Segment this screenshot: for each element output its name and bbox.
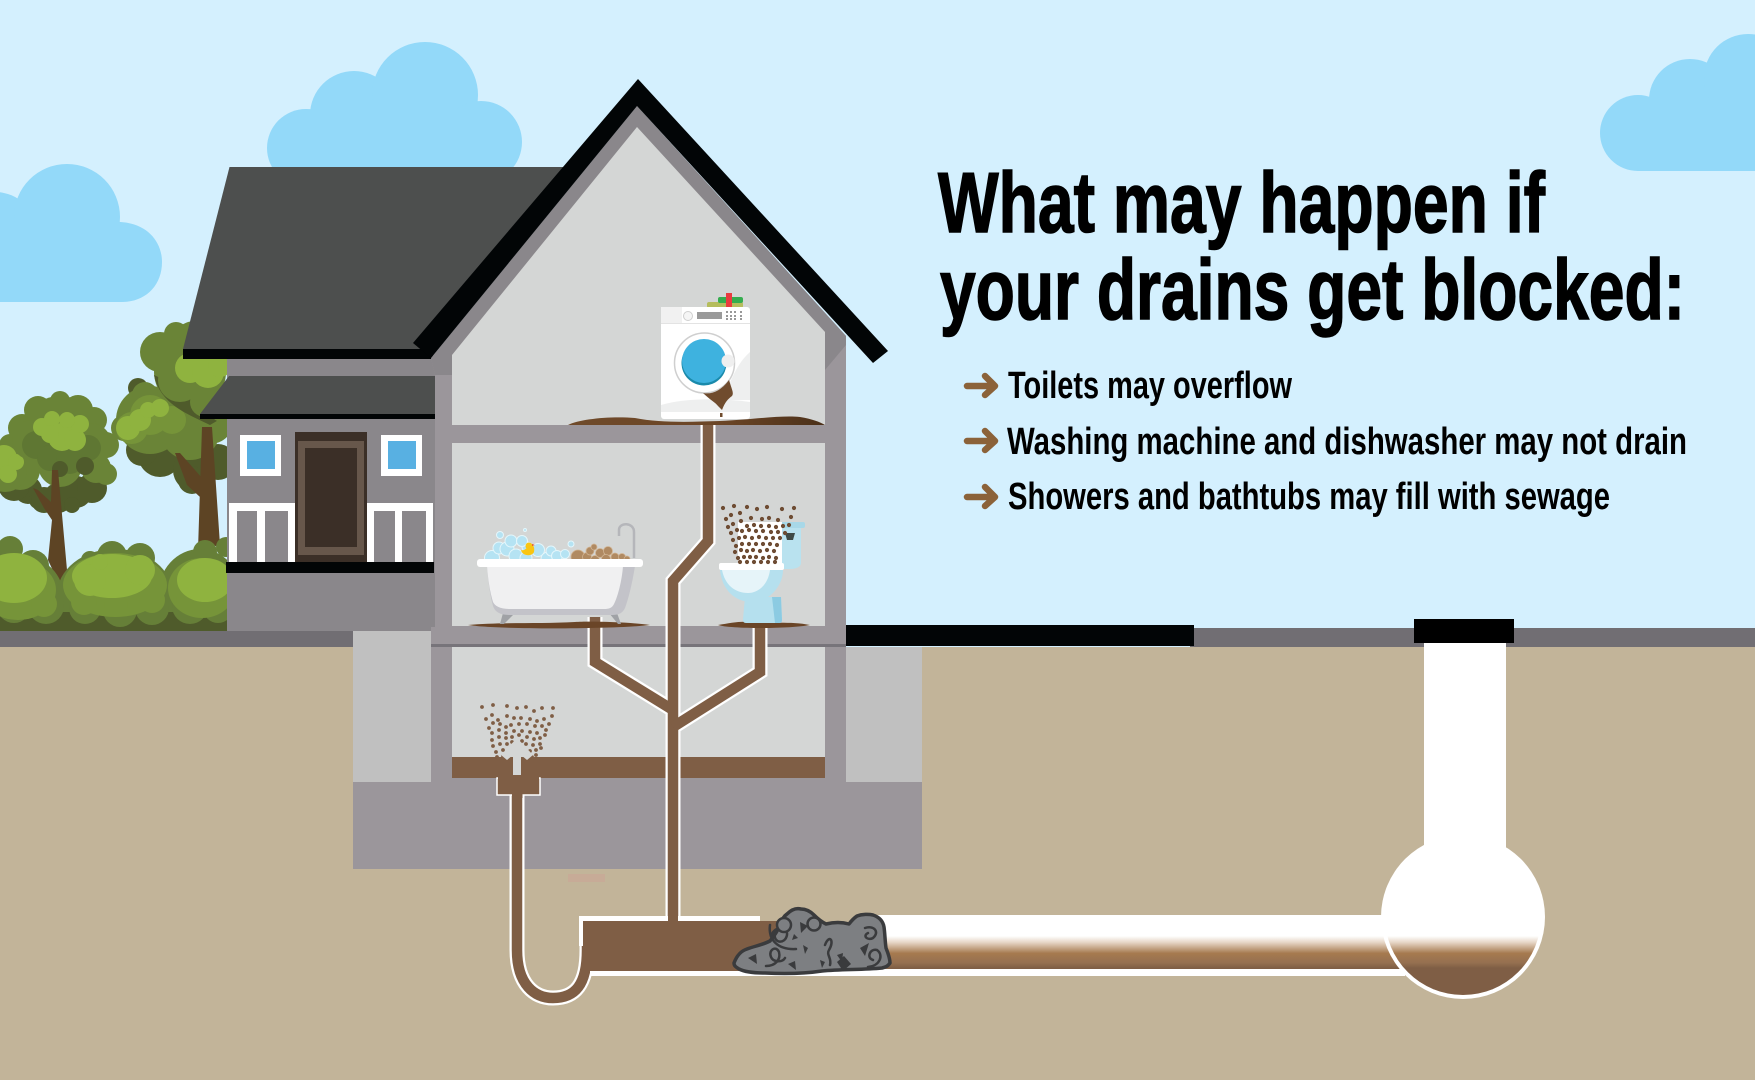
list item: toilets: Toilets may overflow (1008, 365, 1292, 407)
window left (240, 435, 281, 476)
toilet tank (775, 524, 801, 569)
soil stain (568, 874, 605, 882)
list: consequences (967, 365, 1687, 518)
house: side wing (183, 167, 570, 631)
porch roof (200, 376, 435, 414)
tree: right (111, 321, 236, 550)
toilet floor sewage (718, 622, 810, 628)
tub rim (477, 559, 643, 567)
cabinet (661, 307, 750, 419)
gable top band (431, 106, 846, 375)
foundation: left light block (353, 630, 431, 782)
house: gable section (413, 79, 888, 647)
foundation: right light block (844, 647, 922, 782)
house: foundation (353, 627, 922, 869)
ground: pavement strip (0, 628, 1755, 647)
main sewer pipe: clear section (860, 915, 1400, 969)
porch roof eave (200, 414, 435, 419)
bathtub (468, 524, 650, 628)
rubber duck (521, 542, 535, 555)
driveway (846, 625, 1194, 646)
manhole cover (1414, 619, 1514, 643)
bushes (0, 536, 227, 631)
main sewer pipe: partial flow (860, 936, 1400, 969)
leaking sewage (703, 380, 733, 417)
heading: What may happen if (938, 156, 1546, 251)
toilet seat (719, 563, 784, 570)
upper roof (183, 167, 570, 349)
list item: toilets (967, 365, 1292, 407)
manhole (1381, 619, 1545, 1000)
basement sewage floor (452, 757, 825, 778)
gable roof (413, 79, 888, 363)
heading (938, 156, 1685, 338)
tree: far left (0, 434, 47, 509)
basement floor drain (482, 705, 553, 798)
manhole sewage (1388, 937, 1538, 995)
blockage: debris pile (734, 909, 890, 974)
wing wall (227, 359, 435, 631)
cloud: right (1600, 34, 1755, 171)
ground: soil (0, 647, 1755, 1080)
manhole chamber (1381, 835, 1545, 999)
sewage spray (723, 506, 794, 562)
foam bubbles (484, 528, 574, 566)
cloud: left (0, 164, 162, 302)
pipe network: drain stacks and branches (517, 425, 760, 998)
upper floor sewage (568, 417, 825, 425)
window right (381, 435, 422, 476)
main sewer pipe: sewage (583, 921, 803, 971)
railing left (229, 503, 295, 562)
door (295, 432, 367, 562)
tub faucet (619, 524, 634, 558)
basement interior (452, 647, 825, 757)
floor slab line (431, 644, 846, 647)
porch deck (226, 562, 434, 573)
main sewer pipe: outline bottom (590, 969, 1405, 976)
items on top (707, 293, 743, 308)
pipes: white outlines (517, 425, 760, 998)
drain box (497, 778, 540, 795)
washing machine (661, 293, 750, 419)
cloud: center (267, 42, 522, 187)
upper floor interior (452, 127, 825, 425)
stack passes through outline (668, 910, 678, 924)
sewage spray (482, 705, 553, 757)
tub floor sewage (468, 622, 650, 628)
upper roof eave (183, 349, 433, 359)
railing right (367, 503, 433, 562)
tree: left (8, 391, 119, 590)
arrow up (501, 738, 533, 775)
tub feet (500, 613, 621, 624)
toilet flush handle (785, 533, 795, 540)
manhole shaft (1424, 643, 1506, 853)
main floor interior (452, 443, 825, 626)
basement walls (431, 627, 846, 782)
gable walls (431, 106, 846, 647)
drum (674, 333, 734, 393)
foundation: dark concrete (353, 782, 922, 869)
toilet bowl (720, 570, 783, 602)
trees (0, 321, 242, 641)
toilet (718, 506, 810, 628)
tub body (487, 566, 635, 615)
toilet base (743, 597, 782, 623)
sewage bubbles (571, 544, 630, 566)
